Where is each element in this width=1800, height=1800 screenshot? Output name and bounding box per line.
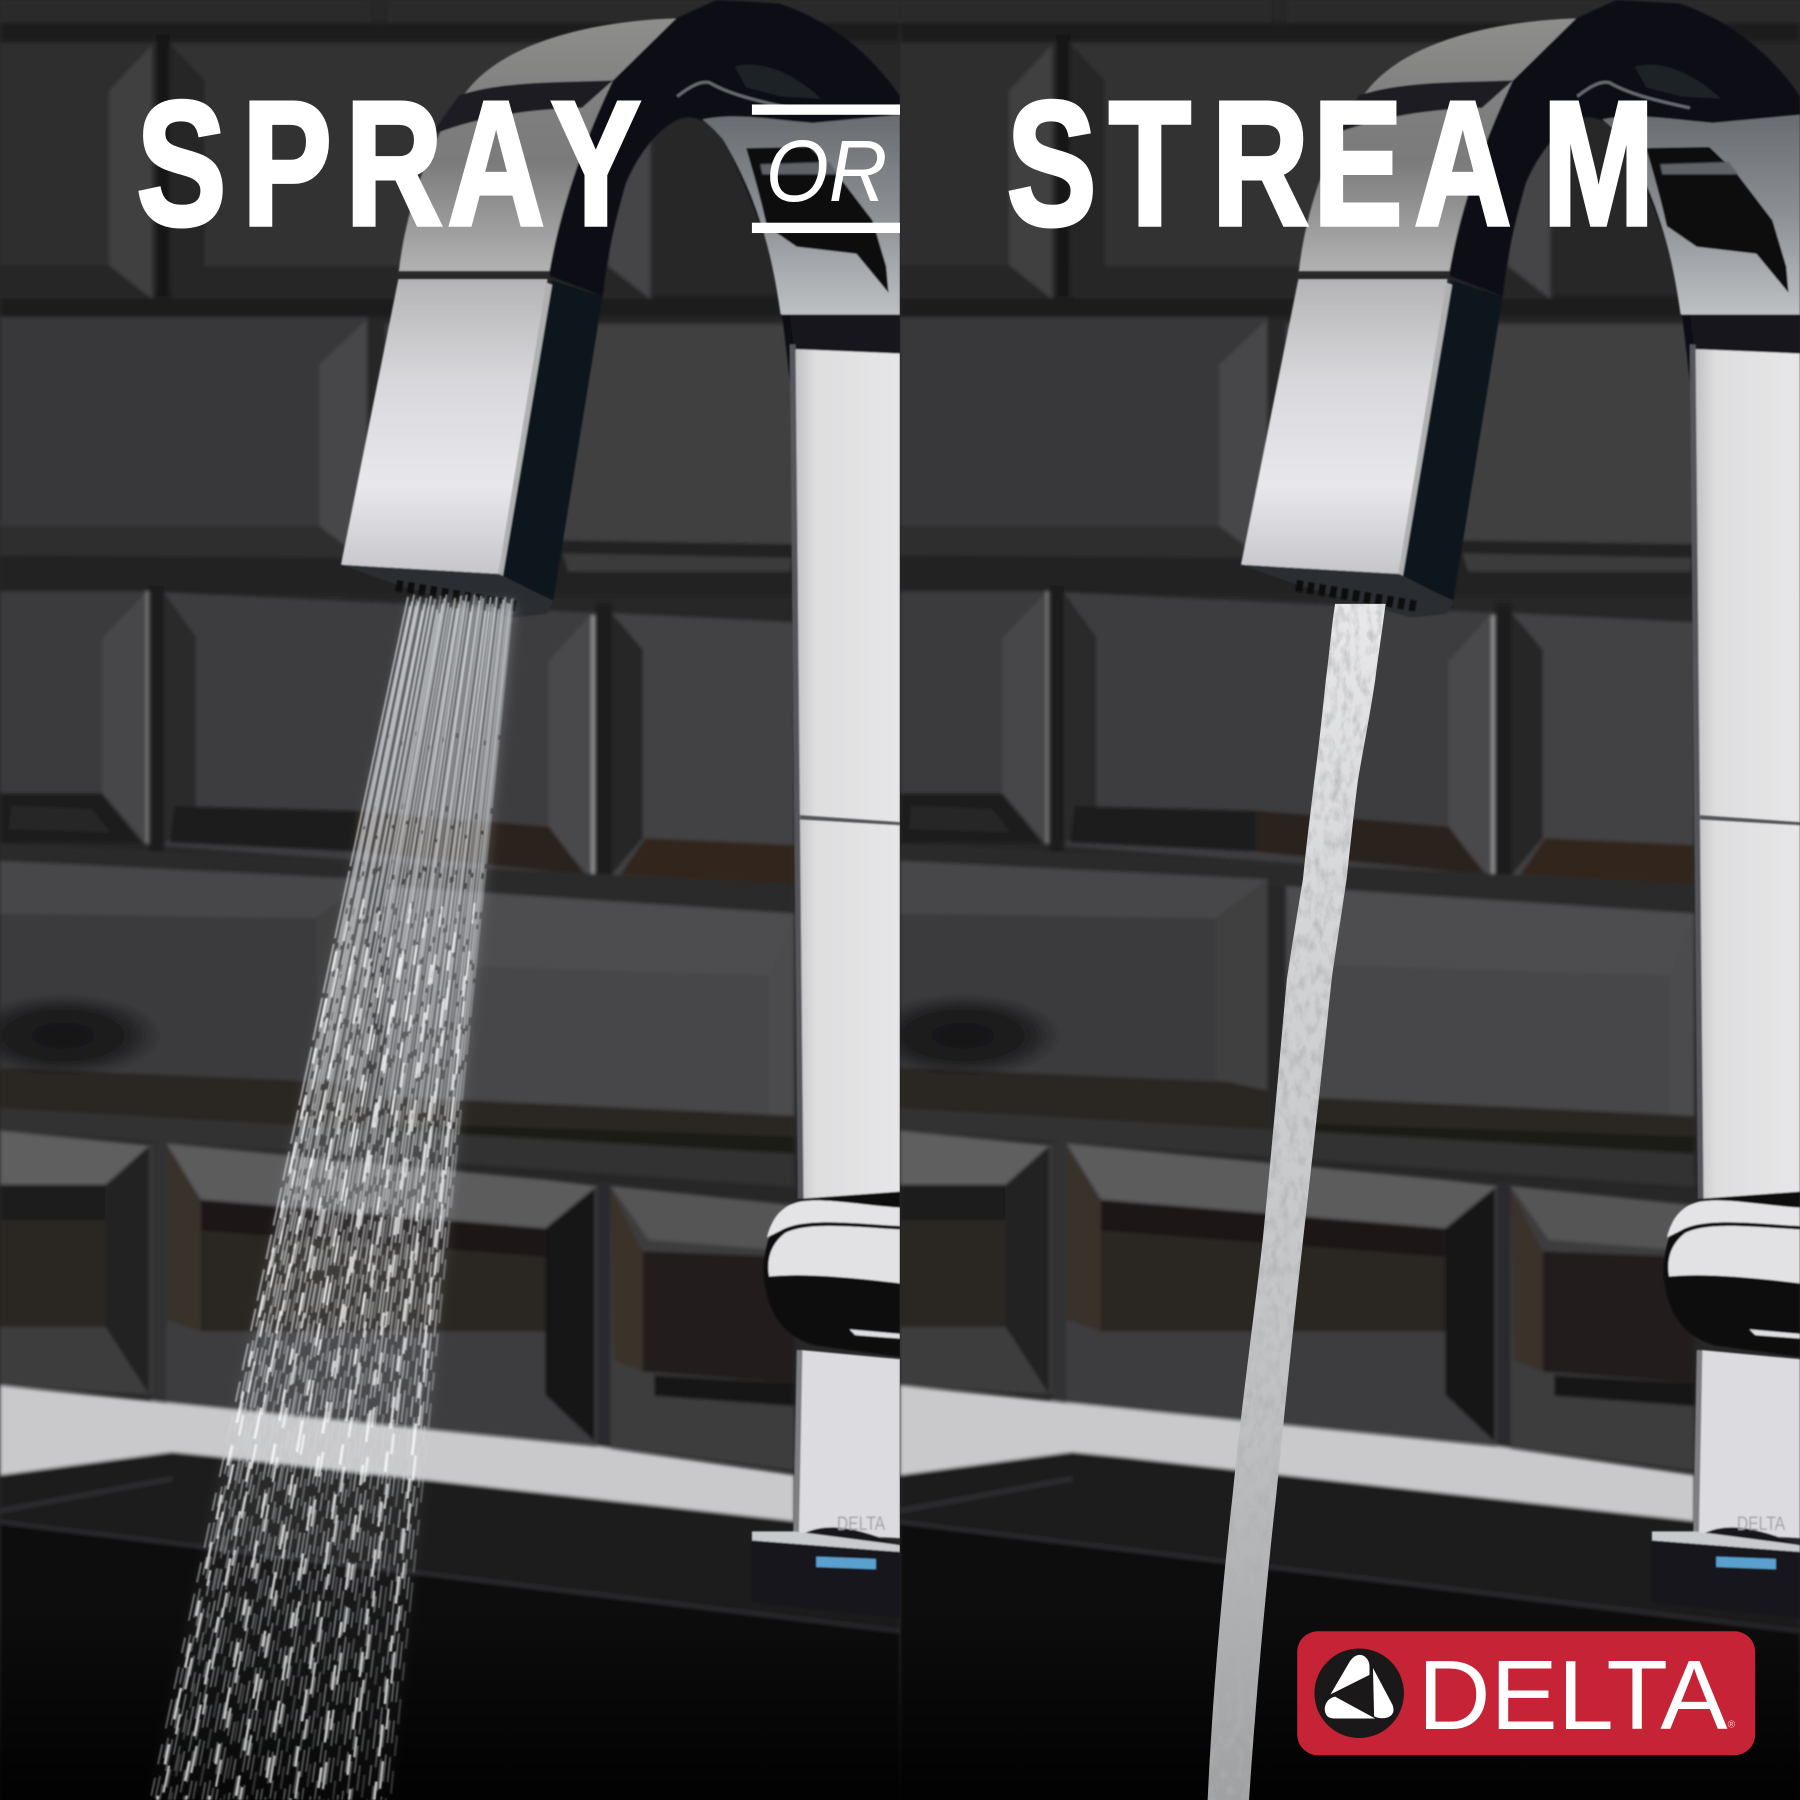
panel: stream background photo scene xyxy=(866,0,1800,1800)
title: spray: SPRAY xyxy=(137,66,641,263)
title: stream: STREAM xyxy=(1007,66,1654,263)
icon: delta triangle mark xyxy=(1314,1648,1404,1738)
registered mark: ® xyxy=(1728,1720,1736,1731)
panel: spray background photo scene xyxy=(0,0,905,1800)
logo: delta badge xyxy=(1297,1631,1755,1755)
divider: or: OR xyxy=(766,123,887,220)
logo wordmark: DELTA xyxy=(1418,1640,1728,1750)
divider: or xyxy=(752,104,900,233)
spray water jets xyxy=(149,595,515,1800)
stream water column xyxy=(1208,604,1386,1800)
